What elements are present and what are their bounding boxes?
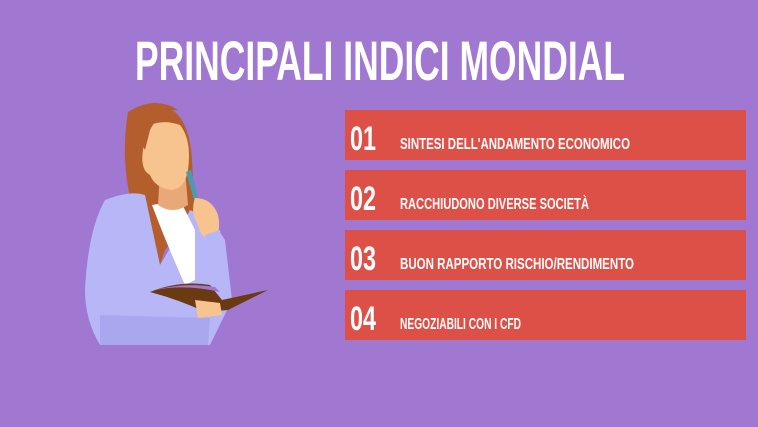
face — [142, 122, 189, 190]
book — [150, 284, 268, 312]
item 03 — [345, 230, 746, 280]
white shirt — [152, 200, 195, 285]
item 04: 04 — [350, 300, 376, 338]
item 03: 03 — [350, 240, 376, 278]
pen — [186, 170, 198, 200]
item 02: 02 — [350, 180, 376, 218]
item 01 — [345, 110, 746, 160]
arm — [205, 230, 228, 282]
neck — [158, 170, 188, 210]
item 04: NEGOZIABILI CON I CFD — [400, 316, 521, 333]
item 01: 01 — [350, 120, 376, 158]
hair back — [125, 106, 195, 265]
item 02: RACCHIUDONO DIVERSE SOCIETÀ — [400, 194, 589, 213]
jacket — [85, 193, 232, 345]
item 03: BUON RAPPORTO RISCHIO/RENDIMENTO — [400, 256, 634, 273]
item 04 — [345, 290, 746, 340]
hand holding book — [195, 300, 222, 318]
item 02 — [345, 170, 746, 220]
hand at chin — [193, 198, 219, 240]
item 01: SINTESI DELL'ANDAMENTO ECONOMICO — [400, 136, 630, 153]
hair front — [128, 103, 178, 150]
illustration: woman with notebook — [85, 103, 268, 345]
